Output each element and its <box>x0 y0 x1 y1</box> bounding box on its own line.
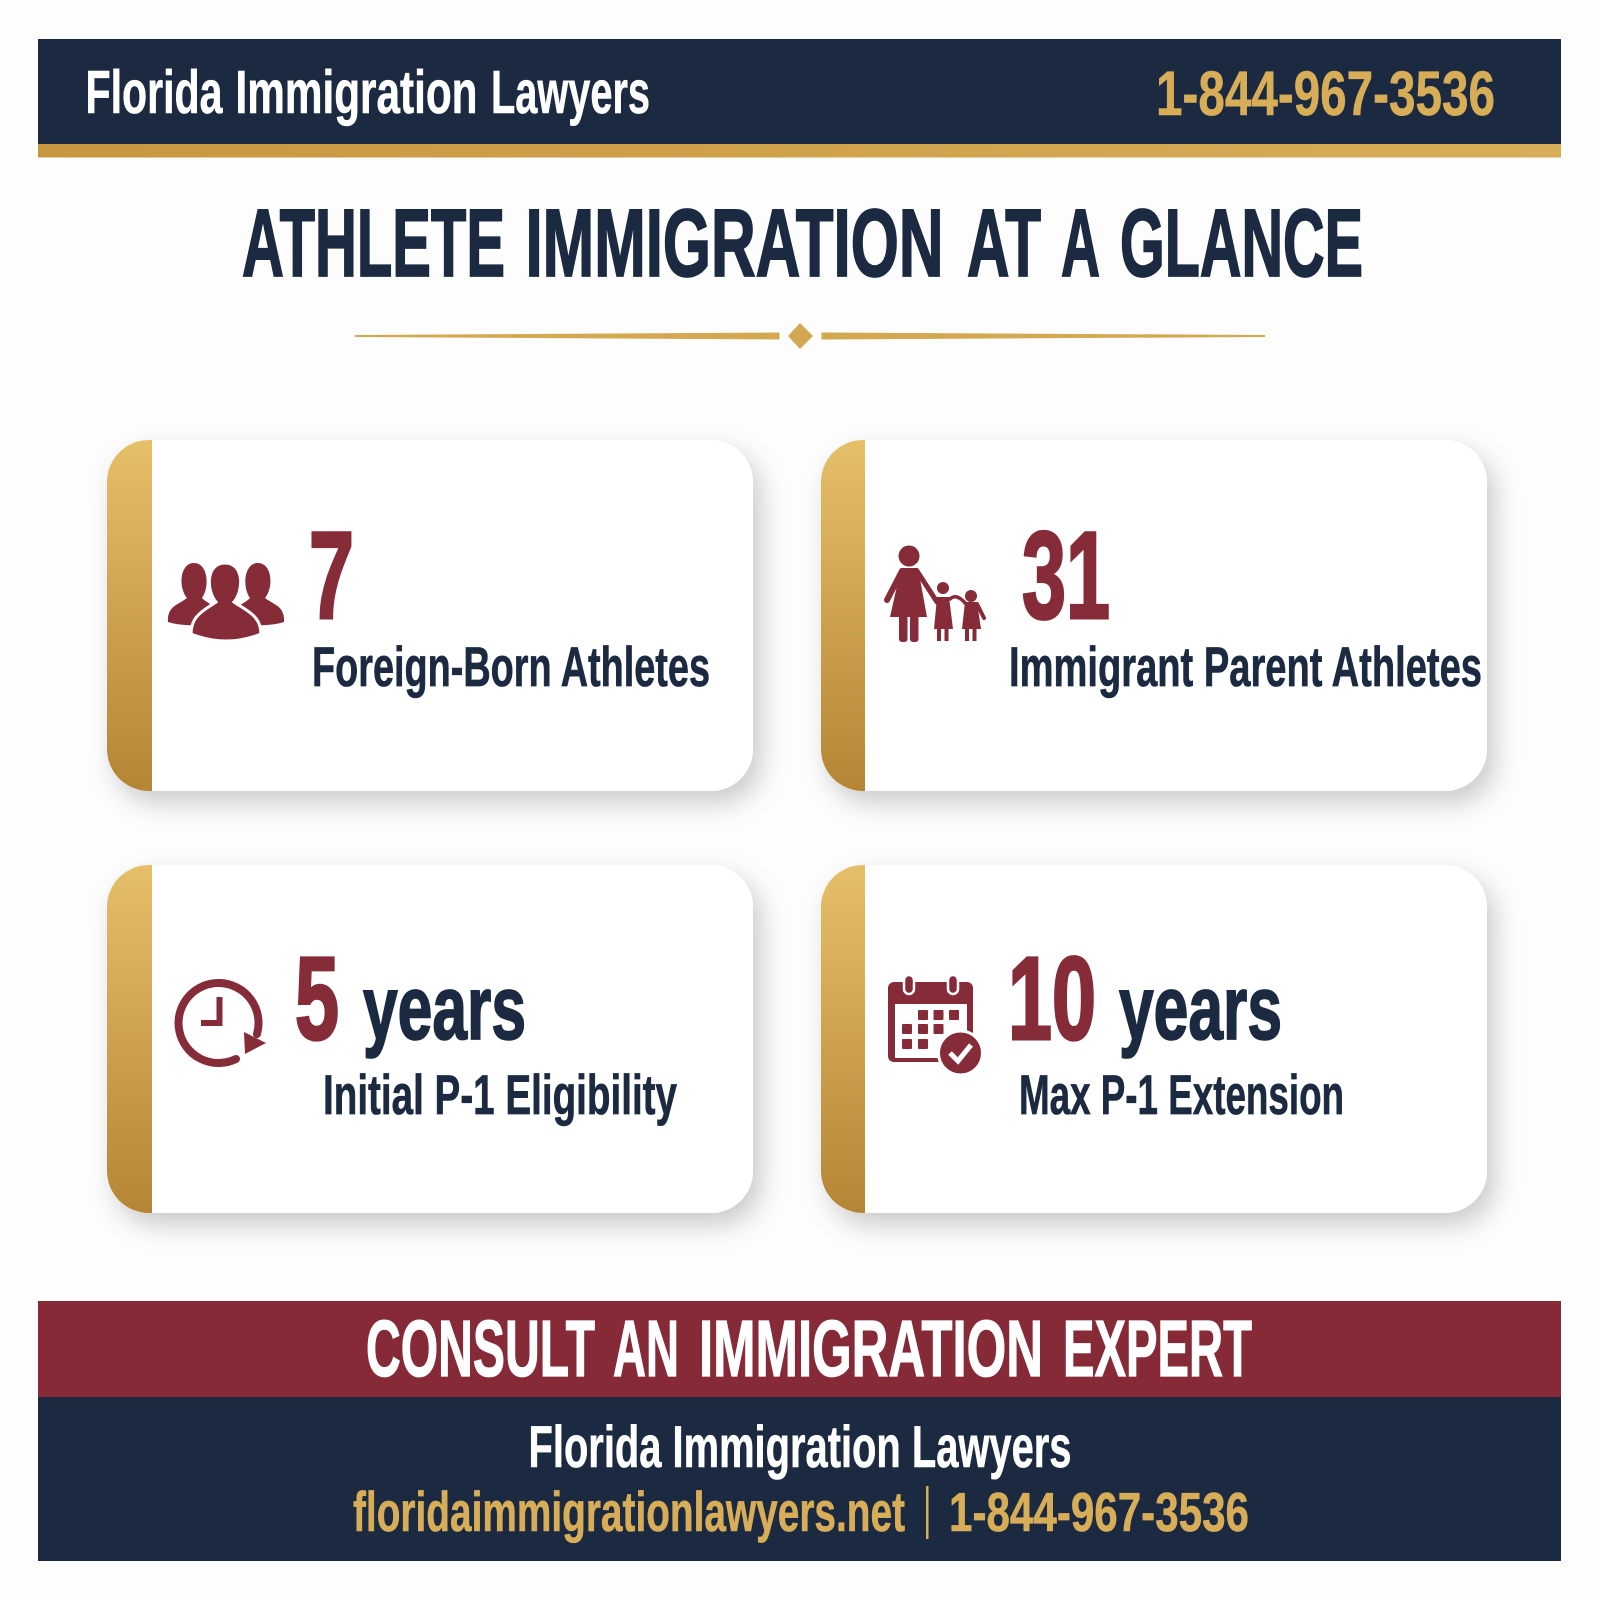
icon: calendar with check <box>888 975 982 1075</box>
stat: 10: 10 <box>1008 933 1096 1065</box>
title divider with diamond <box>355 323 1265 349</box>
label: max P-1 extension: Max P-1 Extension <box>1019 1063 1344 1126</box>
panel: initial P-1 eligibility <box>107 865 753 1213</box>
stat: 31: 31 <box>1022 507 1110 645</box>
footer website: floridaimmigrationlawyers.net <box>353 1480 905 1543</box>
title: A <box>1061 190 1100 297</box>
panel: max P-1 extension <box>821 865 1487 1213</box>
title: AT <box>967 190 1041 297</box>
icon: clock with arrow <box>179 983 266 1063</box>
header firm name <box>86 58 650 126</box>
title: IMMIGRATION <box>526 190 944 297</box>
footer firm name: Florida Immigration Lawyers <box>528 1414 1072 1480</box>
footer phone number: 1-844-967-3536 <box>949 1481 1249 1543</box>
call to action text <box>366 1304 1252 1393</box>
call to action text: EXPERT <box>1063 1304 1252 1393</box>
header firm name: Florida <box>86 58 223 126</box>
icon: parent and children <box>887 546 984 642</box>
title: GLANCE <box>1120 190 1363 297</box>
footer call to action banner <box>38 1301 1561 1397</box>
call to action text: IMMIGRATION <box>699 1304 1043 1393</box>
stat: 7: 7 <box>309 507 354 645</box>
header phone number: 1-844-967-3536 <box>1156 59 1495 129</box>
panel: foreign-born athletes <box>107 440 753 791</box>
unit: years: years <box>1119 958 1282 1059</box>
call to action text: CONSULT <box>366 1304 595 1393</box>
title: ATHLETE <box>242 190 505 297</box>
stat: 5: 5 <box>295 933 339 1065</box>
header firm name: Immigration <box>236 58 478 126</box>
call to action text: AN <box>613 1304 679 1393</box>
panel: immigrant parent athletes <box>821 440 1487 791</box>
icon: group of people <box>168 563 284 641</box>
footer contact panel <box>38 1397 1561 1561</box>
header firm name: Lawyers <box>491 58 650 126</box>
label: foreign-born athletes: Foreign-Born Athletes <box>312 635 710 698</box>
header banner <box>38 39 1561 158</box>
unit: years: years <box>363 958 526 1059</box>
label: initial P-1 eligibility: Initial P-1 Eligibility <box>323 1063 677 1126</box>
title <box>242 190 1363 297</box>
